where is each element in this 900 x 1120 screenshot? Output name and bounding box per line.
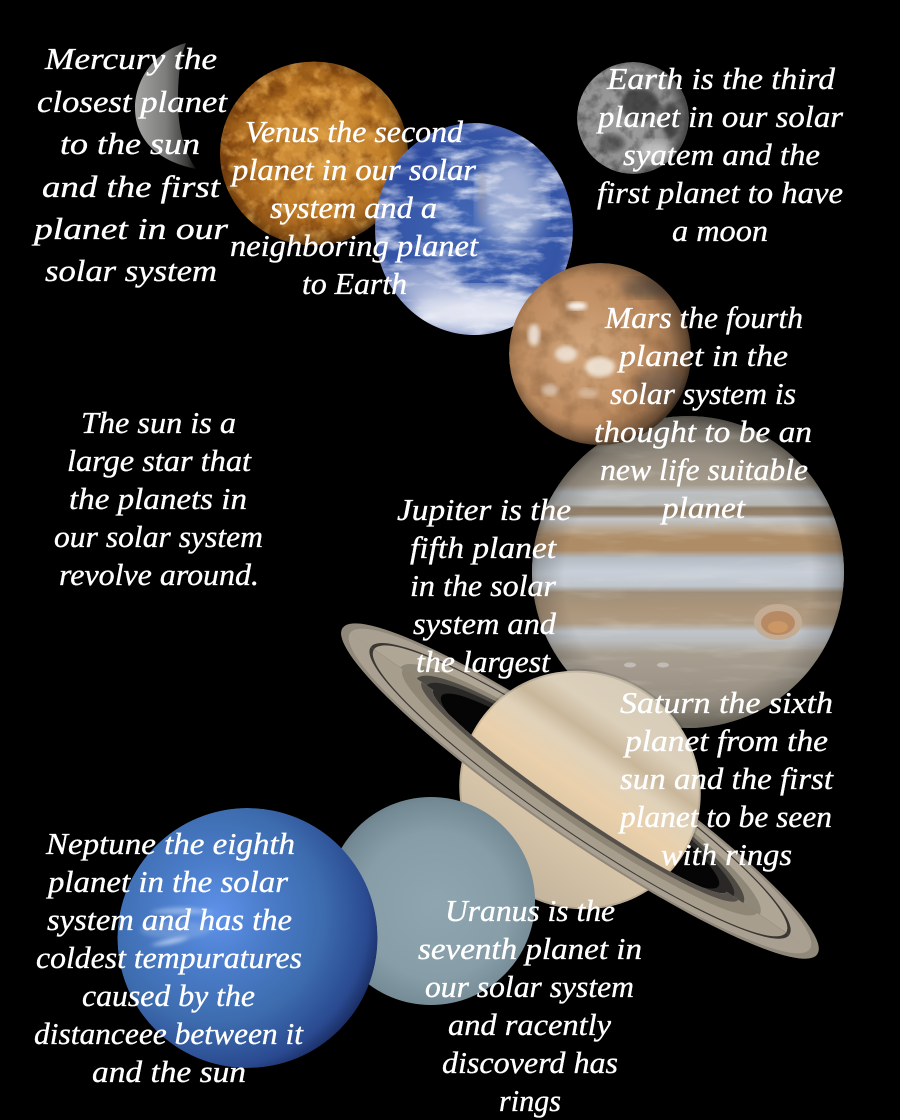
rings: near half xyxy=(341,628,818,959)
text: Uranus: Uranus is the xyxy=(445,893,615,928)
text: Uranus: and racently xyxy=(448,1007,611,1042)
text: Earth: planet in our solar xyxy=(596,99,844,134)
Neptune white clouds xyxy=(140,907,215,945)
lunar maria xyxy=(599,72,680,163)
text: Neptune: planet in the solar xyxy=(46,864,289,899)
text: Mercury: and the first xyxy=(42,169,222,204)
text: Mars: new life suitable xyxy=(600,452,808,487)
text: Neptune: and the sun xyxy=(92,1054,246,1089)
text: Sun: revolve around. xyxy=(59,557,259,592)
text: Uranus xyxy=(418,893,642,1118)
text: Sun: the planets in xyxy=(69,481,247,516)
text: Neptune: coldest tempuratures xyxy=(36,940,302,975)
moon: Earth's moon xyxy=(577,62,689,174)
text: Earth: syatem and the xyxy=(623,137,820,172)
text: Jupiter: the largest xyxy=(416,644,551,679)
text: Venus: to Earth xyxy=(302,266,407,301)
text: Saturn: with rings xyxy=(661,837,792,872)
rings: far half xyxy=(316,589,844,993)
planet: Neptune xyxy=(118,808,378,1068)
text: Saturn: sun and the first xyxy=(620,761,834,796)
Great Red Spot xyxy=(754,604,802,640)
planet: Earth xyxy=(375,123,573,336)
text: Sun: our solar system xyxy=(54,519,263,554)
text: Sun: large star that xyxy=(67,443,252,478)
planet: Jupiter xyxy=(532,416,844,728)
planet: Venus xyxy=(220,61,408,246)
text: Sun xyxy=(54,405,263,592)
Earth cloud masses xyxy=(385,135,545,336)
text: Saturn: planet from the xyxy=(623,723,828,758)
text: Neptune: system and has the xyxy=(47,902,292,937)
text: Saturn xyxy=(618,685,834,872)
text: Mars: planet xyxy=(660,490,746,525)
text: Sun: The sun is a xyxy=(81,405,236,440)
text: Jupiter: in the solar xyxy=(410,568,557,603)
text: Venus: planet in our solar xyxy=(230,152,477,187)
Saturn globe xyxy=(413,624,747,956)
text: Jupiter: fifth planet xyxy=(410,530,557,565)
text: Saturn: Saturn the sixth xyxy=(620,685,833,720)
text: Uranus: our solar system xyxy=(425,969,634,1004)
text: Venus xyxy=(230,114,479,301)
text: Mercury: closest planet xyxy=(37,84,229,119)
text: Mars: thought to be an xyxy=(594,414,812,449)
text: Venus: Venus the second xyxy=(245,114,464,149)
planet: Mars xyxy=(509,263,691,445)
text: Jupiter: system and xyxy=(413,606,557,641)
text: Saturn: planet to be seen xyxy=(618,799,832,834)
text: Mercury: planet in our xyxy=(32,211,229,246)
text: Venus: system and a xyxy=(270,190,437,225)
text: Mars xyxy=(594,300,812,525)
text: Jupiter xyxy=(397,492,571,679)
text: Neptune: caused by the xyxy=(82,978,255,1013)
text: Mars: Mars the fourth xyxy=(604,300,803,335)
text: Earth: Earth is the third xyxy=(606,61,836,96)
text: Mercury: solar system xyxy=(45,253,217,288)
text: Neptune: distanceee between it xyxy=(34,1016,304,1051)
text: Earth: a moon xyxy=(672,213,768,248)
text: Mars: planet in the xyxy=(617,338,788,373)
text: Earth: first planet to have xyxy=(597,175,843,210)
text: Earth xyxy=(596,61,844,248)
planet: Uranus xyxy=(327,797,535,1005)
text: Mercury xyxy=(32,41,229,288)
text: Mercury: Mercury the xyxy=(44,41,217,76)
text: Uranus: rings xyxy=(499,1083,561,1118)
text: Venus: neighboring planet xyxy=(230,228,479,263)
text: Mars: solar system is xyxy=(610,376,796,411)
text: Jupiter: Jupiter is the xyxy=(397,492,571,527)
text: Uranus: discoverd has xyxy=(442,1045,618,1080)
planet: Mercury crescent xyxy=(135,43,196,169)
Mars clouds and dark regions xyxy=(528,278,684,405)
text: Mercury: to the sun xyxy=(60,126,200,161)
text: Neptune xyxy=(34,826,304,1089)
planet: Saturn with rings xyxy=(341,623,819,959)
text: Neptune: Neptune the eighth xyxy=(45,826,295,861)
text: Uranus: seventh planet in xyxy=(418,931,642,966)
